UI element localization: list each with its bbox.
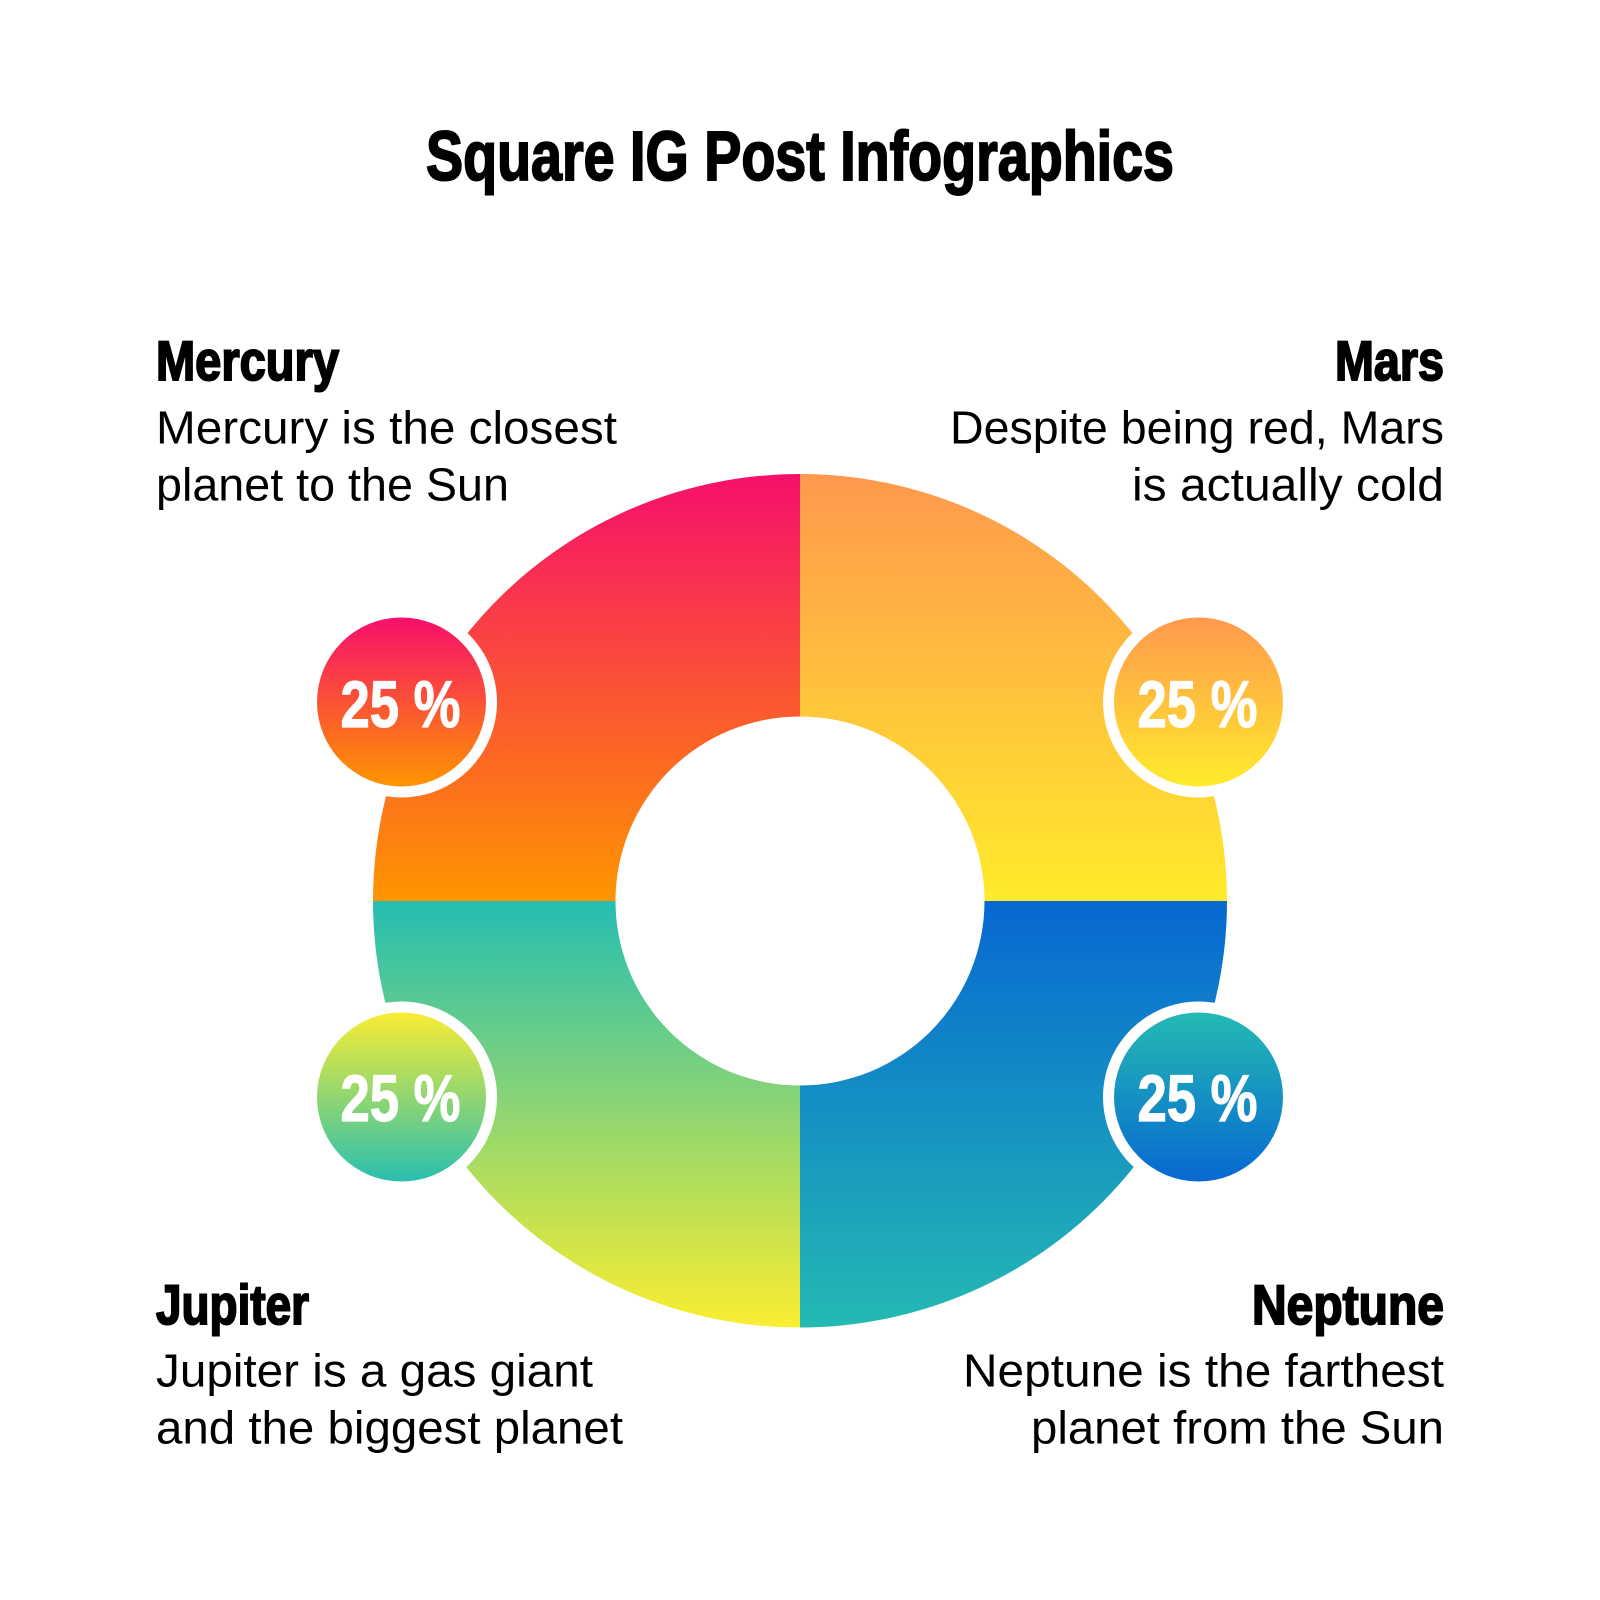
text block: Neptune: planet from the Sun [1031,1402,1444,1454]
text block: Jupiter: and the biggest planet [156,1402,623,1454]
text block: Mercury: Mercury [156,329,339,392]
badge: Neptune 25 % [1103,1002,1294,1192]
badge: Jupiter 25 %: 25 % [340,1061,460,1135]
text block: Mercury: Mercury is the closest [156,402,617,454]
text block: Jupiter [156,1273,623,1454]
segment: Neptune [800,901,1227,1328]
text block: Neptune: Neptune [1252,1273,1444,1336]
donut chart [373,474,1227,1328]
text block: Mars: Mars [1335,329,1444,392]
text block: Mercury: planet to the Sun [156,458,509,510]
text block: Jupiter: Jupiter is a gas giant [156,1344,593,1396]
badge: Mars 25 % [1103,606,1294,798]
title: Square IG Post Infographics [426,117,1174,195]
text block: Mars [950,329,1444,510]
badge: Neptune 25 %: 25 % [1138,1061,1258,1135]
segment: Jupiter [373,901,800,1328]
text block: Jupiter: Jupiter [156,1273,309,1336]
text block: Neptune: Neptune is the farthest [963,1344,1444,1396]
text block: Mars: Despite being red, Mars [950,402,1444,454]
badge: Jupiter 25 % [306,1002,497,1192]
badge: Mars 25 %: 25 % [1138,667,1258,741]
badge: Mercury 25 % [306,606,497,798]
segment: Mars [800,474,1227,901]
text block: Neptune [963,1273,1444,1454]
badge: Mercury 25 %: 25 % [340,667,460,741]
text block: Mars: is actually cold [1132,458,1444,510]
text block: Mercury [156,329,617,510]
segment: Mercury [373,474,800,901]
